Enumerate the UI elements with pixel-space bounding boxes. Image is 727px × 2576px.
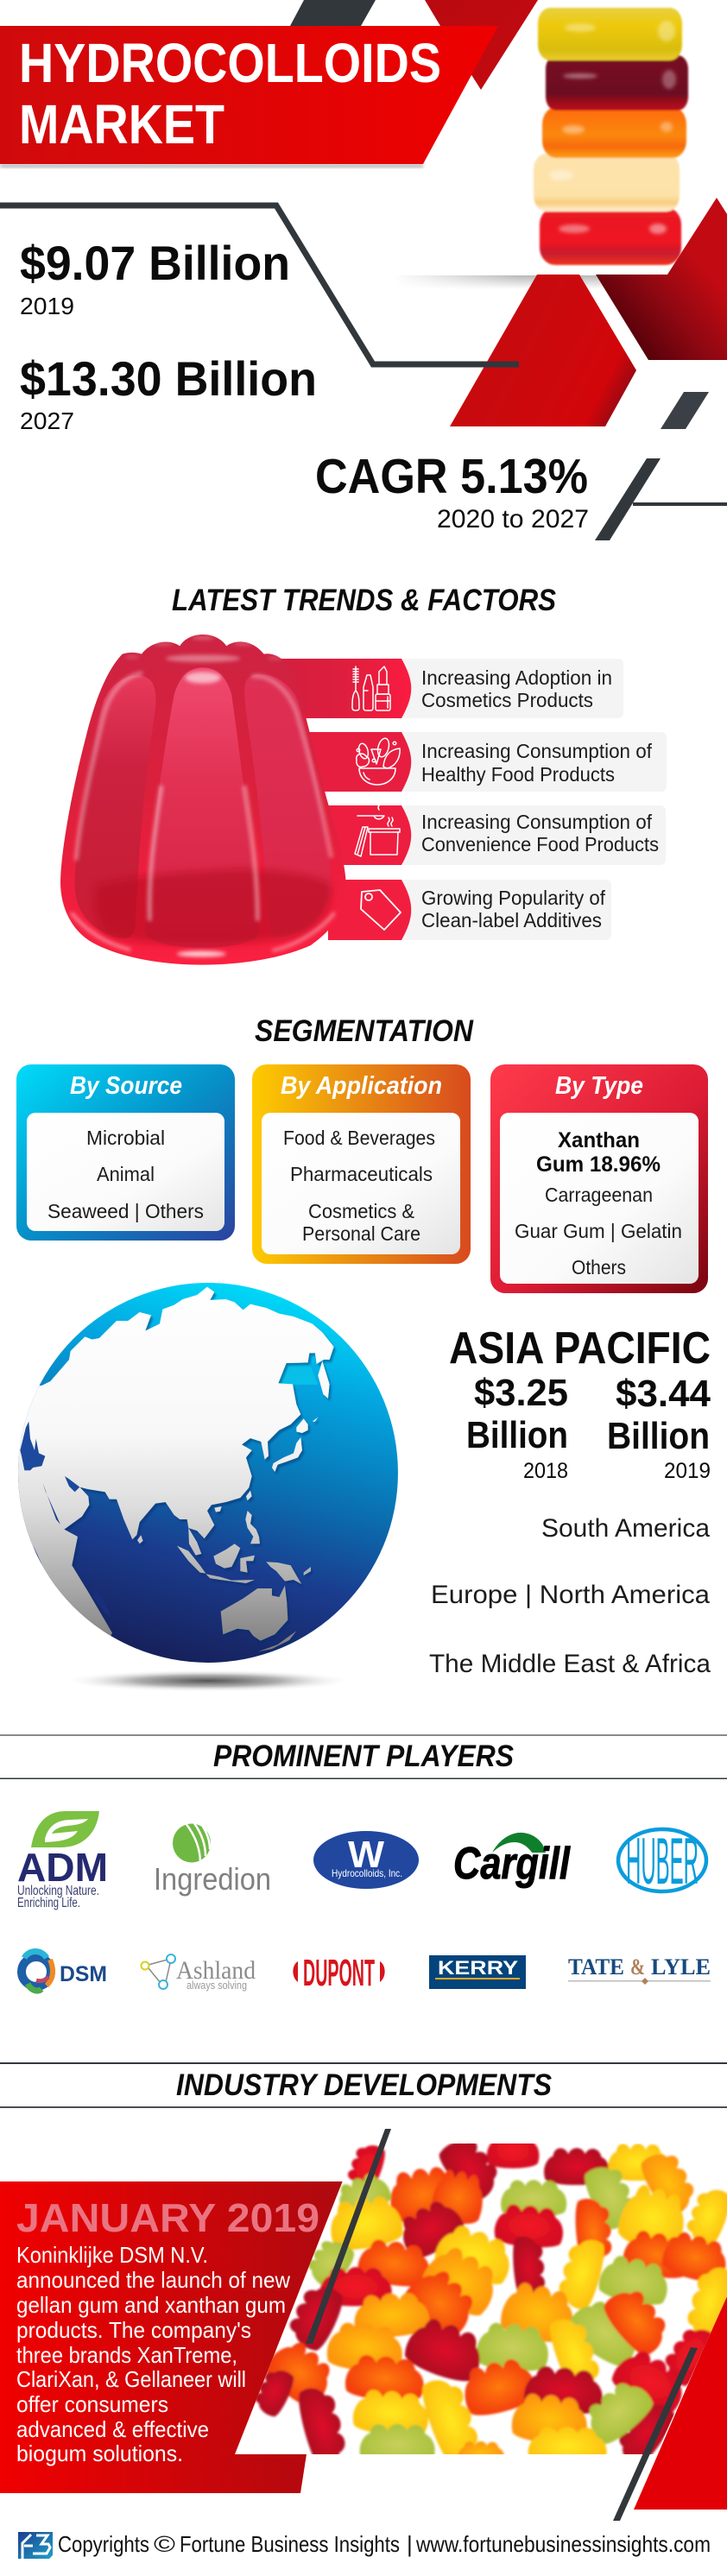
panel: by application [252, 1064, 471, 1264]
panel: by type: Xanthan [558, 1128, 640, 1152]
logo: W Hydrocolloids: W [348, 1834, 384, 1876]
title banner [0, 26, 498, 164]
panel: by application: Personal Care [302, 1222, 420, 1245]
panel: by type: By Type [555, 1072, 643, 1100]
image: stacked gummy candies [534, 8, 688, 265]
callout: January 2019 development: three brands XanTreme, [16, 2342, 237, 2368]
decorative slashes over the image [306, 2129, 698, 2521]
panel: by type: Gum 18.96% [536, 1152, 661, 1177]
image: globe centred on Asia Pacific [13, 1283, 398, 1663]
panel: by source: By Source [70, 1072, 182, 1100]
callout: January 2019 development [16, 2195, 319, 2466]
panel: by application: Pharmaceuticals [290, 1163, 433, 1185]
CAGR: CAGR 5.13% [315, 449, 588, 504]
panel: Asia Pacific values: 2018 [523, 1459, 568, 1483]
icon: Fortune Business Insights logo [18, 2532, 53, 2559]
market value 2027 [20, 351, 317, 434]
regions list [429, 1514, 711, 1678]
panel: red background blocks [0, 2181, 727, 2510]
heading: prominent players: PROMINENT PLAYERS [213, 1739, 514, 1773]
panel: by source: Seaweed | Others [47, 1200, 204, 1222]
panel: by application: Food & Beverages [283, 1127, 435, 1149]
image: gummy bears [235, 2144, 727, 2454]
panel: Asia Pacific values [449, 1323, 711, 1483]
callout: January 2019 development: products. The company's [16, 2317, 251, 2343]
panel: by source [16, 1064, 235, 1241]
trend 2: Healthy Food Products [421, 763, 615, 786]
callout: January 2019 development: Koninklijke DSM N.V. [16, 2242, 208, 2268]
panel: by type: Carrageenan [545, 1184, 653, 1206]
logo: ADM: Unlocking Nature. [17, 1884, 99, 1898]
logo: Ashland [142, 1954, 256, 1992]
panel: Asia Pacific values: Billion [607, 1415, 710, 1457]
panel: trends [259, 659, 667, 940]
logo: Cargill: Cargill [453, 1839, 571, 1889]
trend 4: Clean-label Additives [421, 909, 602, 931]
footer: copyright: Copyrights [58, 2531, 149, 2557]
logo: DSM [22, 1951, 107, 1991]
callout: January 2019 development: JANUARY 2019 [16, 2195, 319, 2240]
image: red jelly [60, 635, 346, 965]
logo: Ashland: always solving [186, 1979, 247, 1992]
logo: Tate & Lyle: & [630, 1954, 645, 1979]
trend 1 [259, 659, 623, 718]
logo: DSM: DSM [60, 1962, 107, 1986]
globe shadow [61, 1670, 355, 1692]
trend 1: Cosmetics Products [421, 689, 593, 711]
logo: W Hydrocolloids [313, 1831, 419, 1889]
logo: ADM: Enriching Life. [17, 1896, 80, 1910]
trend 2 [302, 732, 667, 792]
CAGR: 2020 to 2027 [437, 505, 589, 534]
heading: segmentation: SEGMENTATION [255, 1014, 474, 1048]
icon: convenience food pot [355, 801, 400, 856]
callout: January 2019 development: biogum solutions. [16, 2440, 183, 2466]
title banner: HYDROCOLLOIDS [19, 32, 441, 94]
heading: latest trends: LATEST TRENDS & FACTORS [172, 584, 556, 617]
panel: Asia Pacific values: $3.25 [474, 1372, 568, 1414]
trend 2: Increasing Consumption of [421, 740, 653, 762]
logo: Tate & Lyle: LYLE [651, 1954, 711, 1979]
logo: ADM: ADM [17, 1845, 108, 1890]
CAGR [315, 449, 727, 540]
panel: by type [490, 1064, 708, 1293]
footer: copyright: | [407, 2531, 413, 2557]
footer: copyright: Fortune Business Insights [180, 2531, 400, 2557]
callout: January 2019 development: advanced & effective [16, 2416, 209, 2442]
panel: by application: By Application [281, 1072, 442, 1100]
callout: January 2019 development: ClariXan, & Gellaneer will [16, 2366, 246, 2392]
market value 2027: $13.30 Billion [20, 351, 317, 406]
panel: Asia Pacific values: 2019 [664, 1459, 711, 1483]
logo: Kerry: KERRY [438, 1957, 518, 1979]
logo: DuPont: DUPONT [303, 1952, 375, 1994]
regions list: The Middle East & Africa [429, 1650, 711, 1678]
logo: Ingredion: Ingredion [154, 1861, 271, 1897]
trend 1: Increasing Adoption in [421, 666, 612, 689]
trend 4 [328, 880, 611, 940]
regions list: Europe | North America [431, 1581, 710, 1609]
trend 4: Growing Popularity of [421, 887, 606, 909]
trend 3: Convenience Food Products [421, 833, 659, 856]
logo: Ashland: Ashland [176, 1956, 256, 1985]
panel: Asia Pacific values: $3.44 [616, 1373, 711, 1415]
logo: Tate & Lyle: TATE [568, 1954, 624, 1979]
logo: Ingredion [154, 1823, 271, 1897]
panel: by type: Others [572, 1256, 626, 1279]
logo: Tate & Lyle [568, 1954, 711, 1985]
panel: by application: Cosmetics & [308, 1200, 414, 1222]
trend 3 [319, 805, 666, 865]
panel: Asia Pacific values: Billion [466, 1414, 568, 1456]
icon: cosmetics [352, 666, 390, 710]
logo: ADM [17, 1811, 108, 1910]
heading: industry developments: INDUSTRY DEVELOPMENTS [176, 2068, 552, 2102]
panel: by type: Guar Gum | Gelatin [515, 1220, 682, 1242]
market value 2019 [20, 236, 290, 319]
regions list: South America [541, 1514, 710, 1543]
footer: copyright [18, 2531, 711, 2559]
header graphic shapes [0, 0, 727, 429]
market value 2019: 2019 [20, 293, 74, 319]
icon: tag [361, 890, 401, 930]
trend 3: Increasing Consumption of [421, 811, 653, 833]
logo: DuPont [293, 1952, 385, 1994]
icon: salad bowl [357, 737, 400, 785]
panel: by source: Animal [97, 1163, 155, 1185]
panel: by source: Microbial [86, 1127, 165, 1149]
footer: copyright: © [154, 2531, 175, 2557]
callout: January 2019 development: announced the launch of new [16, 2267, 290, 2293]
logo: Kerry [429, 1955, 526, 1989]
logo: W Hydrocolloids: Hydrocolloids, Inc. [332, 1867, 402, 1879]
market value 2019: $9.07 Billion [20, 236, 290, 290]
callout: January 2019 development: offer consumers [16, 2391, 168, 2417]
title banner: MARKET [19, 93, 224, 155]
connector line with market values [0, 205, 519, 364]
market value 2027: 2027 [20, 407, 74, 434]
callout: January 2019 development: gellan gum and xanthan gum [16, 2292, 286, 2318]
